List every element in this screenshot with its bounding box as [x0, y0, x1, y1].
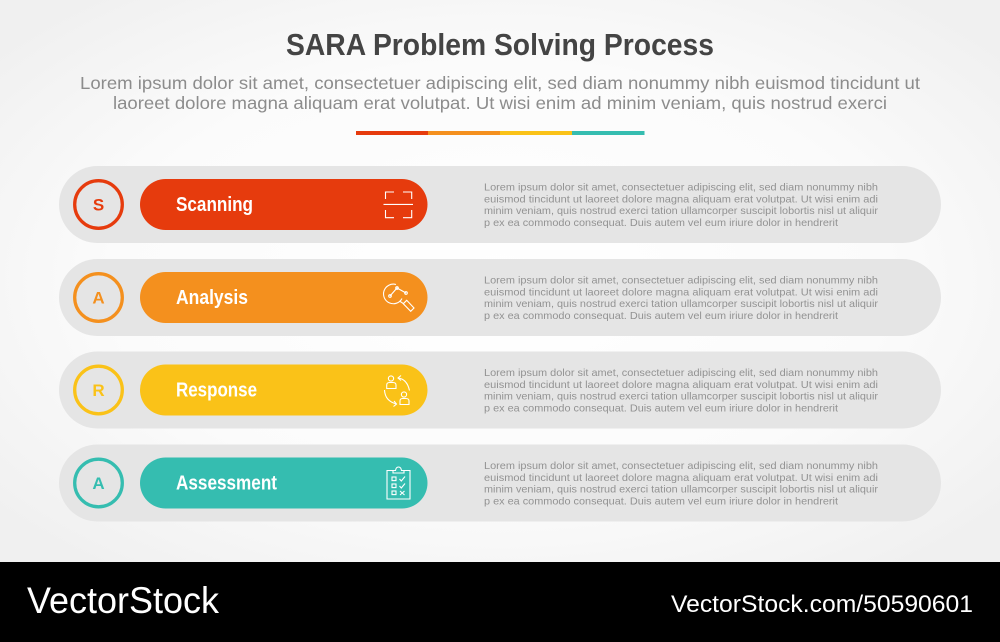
description: analysis: minim veniam, quis nostrud exerci tation ullamcorper suscipit lobortis nisl ut aliquir — [484, 298, 879, 310]
description: response — [484, 367, 879, 414]
panel: scanning row — [59, 166, 941, 243]
description: analysis — [484, 274, 879, 322]
icon: magnifier with nodes — [384, 284, 414, 311]
description: scanning — [484, 182, 879, 229]
subtitle: laoreet dolore magna aliquam erat volutpat. Ut wisi enim ad minim veniam, quis nostrud exerci — [113, 93, 887, 113]
label: analysis: Analysis — [176, 287, 248, 309]
description: assessment: minim veniam, quis nostrud exerci tation ullamcorper suscipit lobortis nisl ut aliquir — [484, 484, 879, 496]
title: SARA Problem Solving Process — [286, 27, 714, 62]
pill: response — [140, 364, 428, 416]
description: response: p ex ea commodo consequat. Duis autem vel eum iriure dolor in hendrerit — [484, 402, 838, 414]
watermark id: VectorStock.com/50590601 — [671, 591, 973, 618]
icon: people exchange cycle — [384, 376, 410, 406]
badge: A: A — [92, 288, 105, 307]
description: analysis: p ex ea commodo consequat. Duis autem vel eum iriure dolor in hendrerit — [484, 310, 838, 322]
label: scanning: Scanning — [176, 194, 253, 216]
label: response: Response — [176, 380, 257, 402]
description: assessment: euismod tincidunt ut laoreet dolore magna aliquam erat volutpat. Ut wisi enim adi — [484, 472, 878, 484]
description: response: Lorem ipsum dolor sit amet, consectetuer adipiscing elit, sed diam nonummy nibh — [484, 367, 878, 379]
description: assessment: Lorem ipsum dolor sit amet, consectetuer adipiscing elit, sed diam nonummy nibh — [484, 460, 878, 472]
watermark footer — [0, 562, 1000, 642]
panel: analysis row — [59, 259, 941, 336]
pill: assessment — [140, 458, 428, 508]
subtitle: Lorem ipsum dolor sit amet, consectetuer adipiscing elit, sed diam nonummy nibh euismod tincidunt ut — [80, 73, 920, 93]
icon: clipboard checklist — [387, 467, 410, 499]
description: scanning: euismod tincidunt ut laoreet dolore magna aliquam erat volutpat. Ut wisi enim adi — [484, 193, 878, 205]
description: scanning: minim veniam, quis nostrud exerci tation ullamcorper suscipit lobortis nisl ut aliquir — [484, 205, 879, 217]
subtitle — [80, 73, 920, 113]
description: scanning: Lorem ipsum dolor sit amet, consectetuer adipiscing elit, sed diam nonummy nibh — [484, 182, 878, 194]
description: analysis: euismod tincidunt ut laoreet dolore magna aliquam erat volutpat. Ut wisi enim adi — [484, 286, 878, 298]
pill: scanning — [140, 179, 428, 230]
description: analysis: Lorem ipsum dolor sit amet, consectetuer adipiscing elit, sed diam nonummy nibh — [484, 274, 878, 286]
label: assessment: Assessment — [176, 472, 277, 494]
colour divider — [356, 131, 644, 135]
panel: response row — [59, 352, 941, 428]
description: assessment: p ex ea commodo consequat. Duis autem vel eum iriure dolor in hendrerit — [484, 495, 838, 507]
description: response: euismod tincidunt ut laoreet dolore magna aliquam erat volutpat. Ut wisi enim adi — [484, 379, 878, 391]
badge: S — [75, 181, 122, 228]
pill: analysis — [140, 272, 428, 323]
badge: A — [75, 459, 122, 507]
panel: assessment row — [59, 444, 941, 522]
badge: A: A — [92, 474, 105, 493]
badge: R — [75, 366, 122, 414]
badge: S: S — [93, 195, 104, 214]
watermark logo: VectorStock — [27, 580, 219, 621]
description: response: minim veniam, quis nostrud exerci tation ullamcorper suscipit lobortis nisl ut aliquir — [484, 391, 879, 403]
badge: A — [75, 274, 122, 321]
badge: R: R — [92, 381, 105, 400]
description: assessment — [484, 460, 879, 507]
description: scanning: p ex ea commodo consequat. Duis autem vel eum iriure dolor in hendrerit — [484, 217, 838, 229]
icon: scan frame — [384, 192, 413, 218]
